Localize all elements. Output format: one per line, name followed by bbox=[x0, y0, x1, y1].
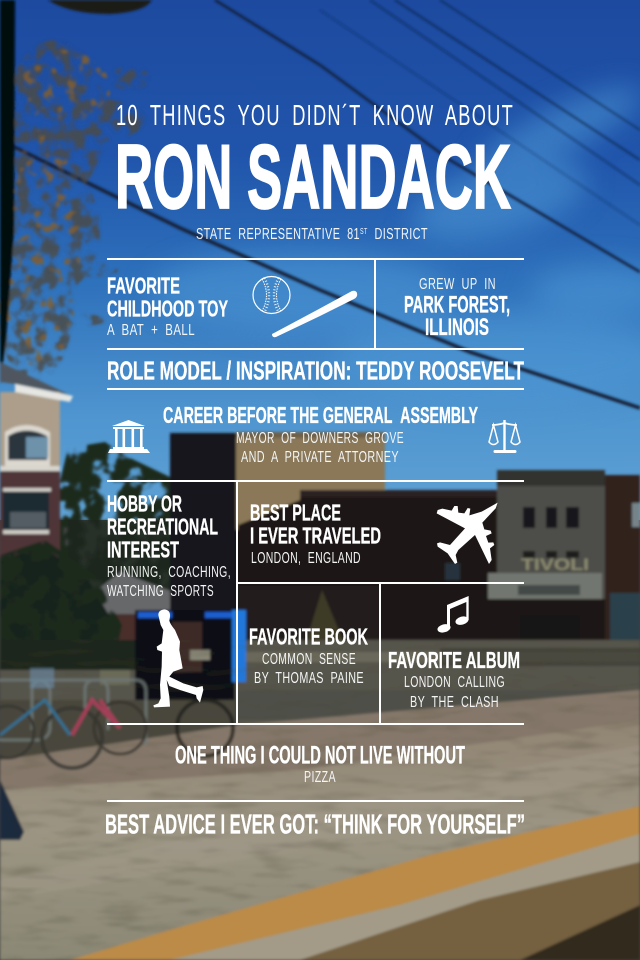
panel: hobby or recreational interest: HOBBY OR bbox=[107, 490, 182, 516]
icon: music notes bbox=[437, 596, 469, 634]
panel: grew up in: PARK FOREST, bbox=[404, 292, 510, 318]
panel: career: AND A PRIVATE ATTORNEY bbox=[241, 449, 399, 466]
panel: one thing I could not live without bbox=[175, 742, 465, 786]
near tree bbox=[0, 546, 115, 690]
yellow tactile strip bbox=[70, 806, 640, 960]
panel divider lines bbox=[107, 258, 524, 802]
background photo: street scene with sky and buildings: TIVOLI bbox=[521, 555, 589, 574]
panel: hobby or recreational interest bbox=[107, 490, 231, 707]
panel: favorite album: LONDON CALLING bbox=[404, 674, 505, 691]
distant trees bbox=[58, 442, 172, 650]
panel: best place traveled: LONDON, ENGLAND bbox=[251, 550, 361, 567]
pole and lamp bbox=[0, 0, 15, 385]
icon: runner silhouette bbox=[153, 609, 203, 707]
icon: scales of justice bbox=[489, 420, 520, 452]
panel: hobby or recreational interest: INTEREST bbox=[107, 536, 179, 562]
left building bbox=[0, 362, 70, 395]
panel: favorite book: COMMON SENSE bbox=[262, 651, 356, 668]
panel: best place traveled bbox=[250, 500, 498, 567]
panel: favorite book: FAVORITE BOOK bbox=[249, 624, 368, 650]
panel: hobby or recreational interest: WATCHING SPORTS bbox=[107, 583, 214, 600]
panel: favorite book: BY THOMAS PAINE bbox=[254, 670, 364, 687]
panel: one thing I could not live without: PIZZA bbox=[304, 769, 336, 786]
panel: favorite book bbox=[249, 624, 368, 687]
foliage bbox=[0, 40, 150, 380]
subtitle: STATE REPRESENTATIVE 81 bbox=[196, 226, 437, 243]
icon: government building bbox=[108, 420, 150, 453]
panel: favorite childhood toy bbox=[107, 272, 357, 339]
panel: career: MAYOR OF DOWNERS GROVE bbox=[236, 430, 404, 447]
bus stop bbox=[135, 610, 235, 715]
ground bbox=[0, 700, 640, 960]
subtitle: DISTRICT bbox=[368, 226, 428, 243]
pedestrian leg bbox=[0, 780, 24, 840]
brick and dark buildings bbox=[170, 433, 242, 653]
street band bbox=[0, 640, 640, 740]
panel: grew up in: ILLINOIS bbox=[425, 314, 489, 341]
panel: grew up in: GREW UP IN bbox=[419, 276, 496, 293]
panel: hobby or recreational interest: RECREATIONAL bbox=[107, 514, 218, 540]
bike racks and bicycles bbox=[0, 680, 233, 768]
panel: favorite childhood toy: FAVORITE bbox=[107, 272, 180, 298]
panel: favorite album: BY THE CLASH bbox=[410, 694, 499, 711]
panel: favorite childhood toy: A BAT + BALL bbox=[107, 322, 195, 339]
panel: career bbox=[108, 402, 520, 466]
panel: favorite album: FAVORITE ALBUM bbox=[388, 647, 520, 673]
wires bbox=[10, 0, 640, 408]
panel: hobby or recreational interest: RUNNING, COACHING, bbox=[107, 564, 231, 581]
panel: best place traveled: BEST PLACE bbox=[250, 500, 341, 526]
icon: airplane bbox=[437, 503, 498, 564]
curb bbox=[170, 834, 640, 960]
title block bbox=[115, 100, 514, 243]
subtitle: ST bbox=[360, 227, 368, 236]
panel: grew up in bbox=[404, 276, 510, 341]
panel: best place traveled: I EVER TRAVELED bbox=[250, 522, 381, 548]
panel: favorite album bbox=[388, 596, 520, 711]
roof behind runner bbox=[78, 572, 210, 614]
icon: baseball bbox=[253, 276, 290, 314]
icon: bat bbox=[272, 291, 357, 337]
panel: favorite childhood toy: CHILDHOOD TOY bbox=[107, 296, 228, 322]
